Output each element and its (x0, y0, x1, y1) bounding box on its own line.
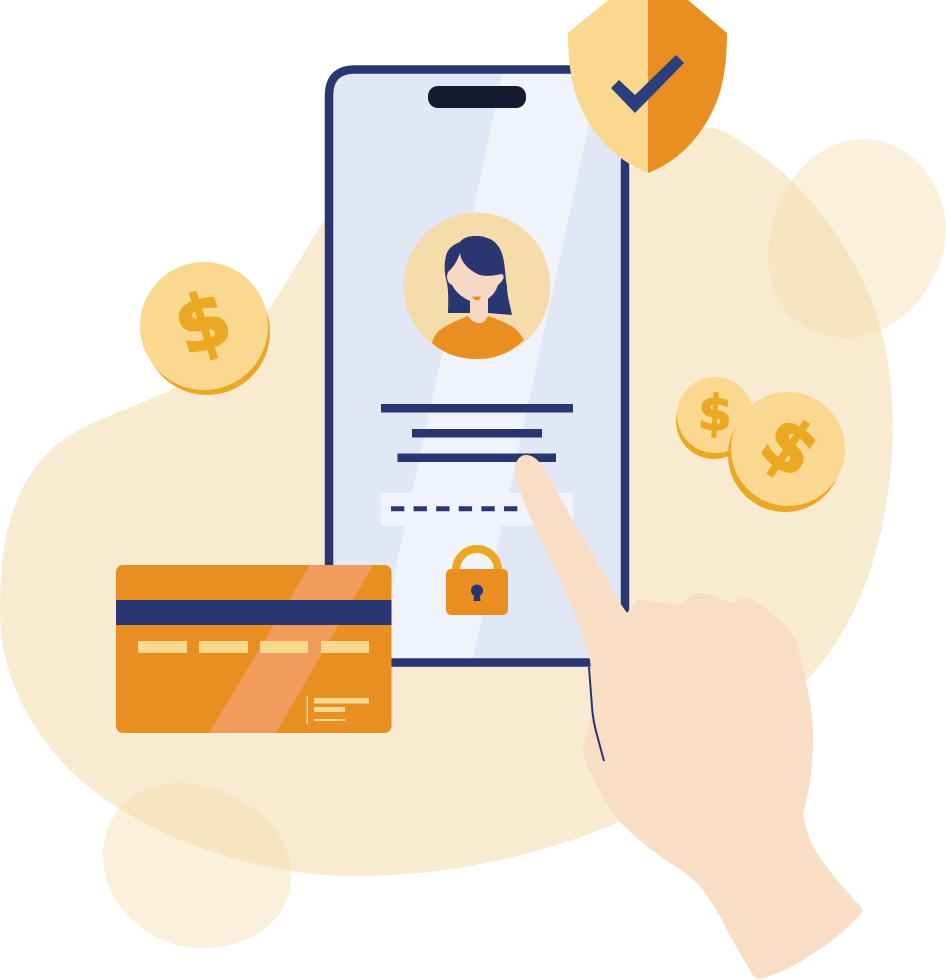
hand outline stroke (589, 667, 604, 761)
shield icon (568, 0, 727, 173)
phone screen (329, 69, 625, 662)
phone frame (329, 70, 625, 662)
screen reflection (376, 73, 600, 659)
magnetic stripe (116, 600, 392, 625)
card body (116, 565, 392, 733)
shield left half (568, 0, 648, 173)
profile avatar (404, 212, 550, 360)
background blob: bottom left (103, 783, 291, 948)
coin small right (676, 377, 753, 459)
phone (329, 69, 625, 662)
hair (445, 236, 512, 315)
shirt (432, 316, 524, 359)
credit card (116, 565, 392, 733)
form lines (381, 404, 573, 462)
card sheen (209, 565, 373, 733)
coin left (140, 262, 270, 395)
shield right half (648, 0, 727, 173)
dollar sign: $ (164, 272, 241, 373)
background blob: top right (768, 139, 946, 338)
card number (138, 641, 369, 653)
background blob: large cream (0, 128, 893, 876)
dollar sign: $ (697, 384, 734, 443)
padlock icon (446, 549, 508, 615)
phone notch (428, 86, 526, 108)
signature lines (306, 696, 369, 724)
neck (470, 298, 488, 324)
dollar sign: $ (746, 399, 833, 494)
mouth (472, 296, 481, 300)
avatar circle (404, 212, 550, 360)
password field (381, 493, 573, 526)
face (447, 253, 504, 304)
hand pointing (515, 455, 862, 979)
coin large right (728, 392, 845, 512)
check mark (611, 55, 684, 113)
